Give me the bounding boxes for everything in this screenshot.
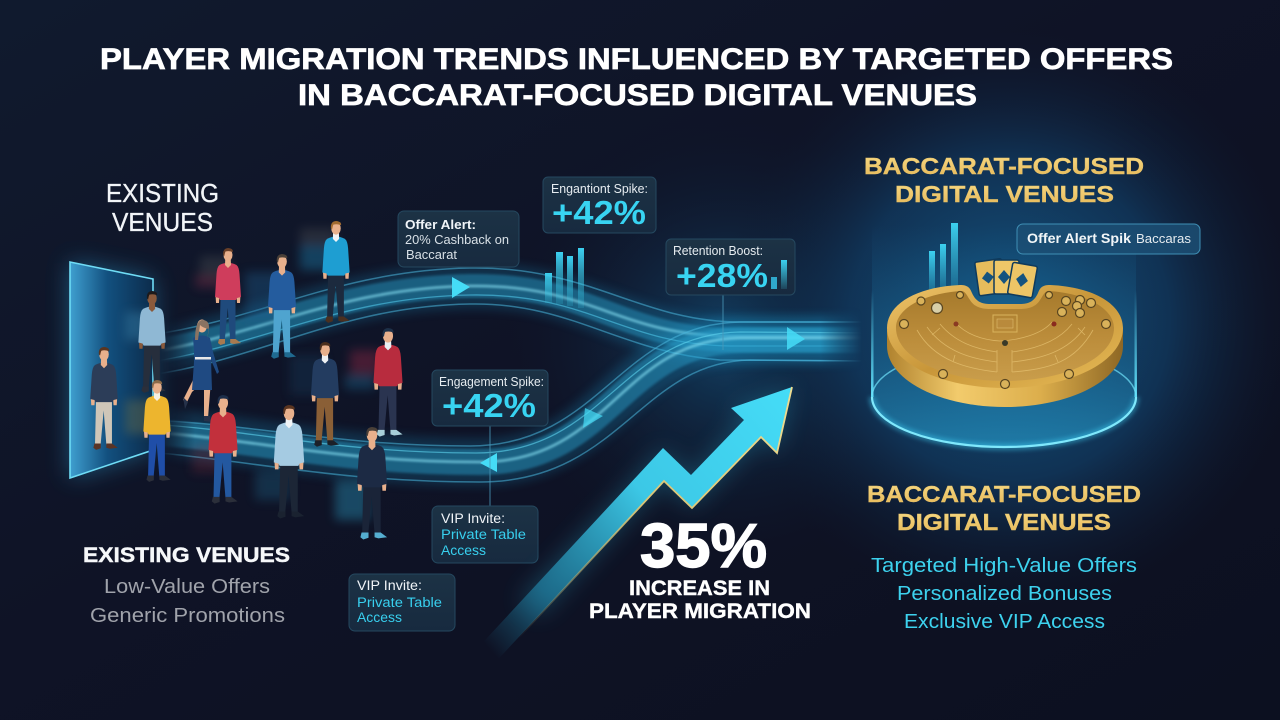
- heading: existing venues top: VENUES: [112, 207, 213, 237]
- callout: vip invite upper: Access: [441, 543, 486, 558]
- holographic platform: [871, 225, 1137, 447]
- callout: offer alert baccaras: Baccaras: [1136, 231, 1191, 246]
- callout: top engagement spike: +42%: [552, 194, 646, 231]
- baccarat table: [887, 285, 1123, 407]
- callout: vip invite lower: Private Table: [357, 595, 442, 610]
- callout: top engagement spike: [543, 177, 656, 233]
- title: IN BACCARAT-FOCUSED DIGITAL VENUES: [298, 79, 977, 112]
- heading: existing venues top: [106, 178, 219, 237]
- heading: baccarat venues lower: [867, 481, 1141, 535]
- heading: existing venues top: EXISTING: [106, 178, 219, 208]
- callout: vip invite lower: VIP Invite:: [357, 578, 422, 593]
- callout: vip invite lower: [349, 574, 455, 631]
- icon: playing cards: [975, 259, 1038, 298]
- arrow: growth: [474, 387, 792, 668]
- list: existing venue offers: Low-Value Offers: [104, 575, 270, 598]
- stat: 35 percent: [589, 512, 811, 623]
- heading: baccarat venues top: DIGITAL VENUES: [895, 181, 1114, 207]
- person: dark suit: [357, 427, 387, 540]
- mini bars: engagement: [545, 248, 584, 308]
- callout: retention boost: +28%: [676, 257, 768, 294]
- arrow: merged stream: [787, 327, 805, 350]
- callout: lower engagement spike: +42%: [442, 387, 536, 424]
- person: woman in red top: [215, 248, 241, 345]
- list: venue benefits: Targeted High-Value Offers: [871, 554, 1137, 577]
- callout: top engagement spike: Engantiont Spike:: [551, 181, 648, 196]
- person: red sweater: [373, 328, 403, 437]
- arrow: top stream: [452, 277, 470, 298]
- list: venue benefits: Exclusive VIP Access: [904, 610, 1105, 633]
- merged stream highlight: [720, 332, 870, 348]
- callout: offer alert: Baccarat: [406, 247, 457, 262]
- person: blue sweater: [268, 254, 296, 359]
- heading: baccarat venues top: BACCARAT-FOCUSED: [864, 153, 1144, 179]
- migration flow streams: [150, 268, 870, 482]
- table markings: [917, 322, 1093, 372]
- callout: offer alert: 20% Cashback on: [405, 232, 509, 247]
- callout: vip invite lower: Access: [357, 610, 402, 625]
- top stream: [150, 268, 870, 375]
- callout: retention boost: [666, 239, 795, 295]
- portal door: [70, 262, 153, 478]
- callout: retention boost: Retention Boost:: [673, 243, 763, 258]
- person: cyan jacket: [322, 221, 350, 323]
- heading: baccarat venues lower: DIGITAL VENUES: [897, 509, 1111, 535]
- list: venue benefits: Personalized Bonuses: [897, 582, 1112, 605]
- heading: baccarat venues top: [864, 153, 1144, 207]
- list: venue benefits: [871, 554, 1137, 633]
- heading: baccarat venues lower: BACCARAT-FOCUSED: [867, 481, 1141, 507]
- person: light blue shirt: [138, 291, 166, 393]
- person: light blue shirt and tie: [274, 405, 304, 518]
- callout: offer alert baccaras: [1017, 224, 1200, 254]
- motion trails behind people: [125, 228, 380, 520]
- callout: vip invite upper: VIP Invite:: [441, 511, 505, 526]
- title: PLAYER MIGRATION TRENDS INFLUENCED BY TARGETED OFFERS: [100, 43, 1173, 76]
- person: red shirt: [208, 395, 238, 504]
- mini bars: venue: [929, 223, 958, 295]
- person: yellow cardigan: [143, 380, 171, 482]
- arrow: rising bottom stream: [583, 408, 603, 428]
- person: dark sweater: [90, 347, 118, 450]
- callout: offer alert: Offer Alert:: [405, 217, 476, 232]
- stat: 35 percent: INCREASE IN: [629, 577, 770, 600]
- callout: offer alert baccaras: Offer Alert Spik: [1027, 230, 1131, 246]
- title: [100, 43, 1173, 112]
- callout: vip invite upper: Private Table: [441, 527, 526, 542]
- people group: [90, 221, 403, 540]
- list: existing venue offers: Generic Promotions: [90, 604, 285, 627]
- person: navy blazer: [311, 342, 339, 447]
- callout: vip invite upper: [432, 506, 538, 563]
- bottom stream: [150, 322, 870, 482]
- person: woman in blue dress: [183, 320, 219, 422]
- stat: 35 percent: 35%: [640, 512, 767, 581]
- heading: existing venues lower: EXISTING VENUES: [83, 544, 290, 567]
- callout: lower engagement spike: Engagement Spike:: [439, 374, 544, 389]
- list: existing venue offers: [90, 575, 285, 627]
- callout: lower engagement spike: [432, 370, 548, 426]
- callout: offer alert: [398, 211, 519, 267]
- chips: [900, 292, 1110, 388]
- connector lines: [490, 295, 723, 506]
- stat: 35 percent: PLAYER MIGRATION: [589, 600, 811, 623]
- arrow: bottom stream: [480, 453, 497, 472]
